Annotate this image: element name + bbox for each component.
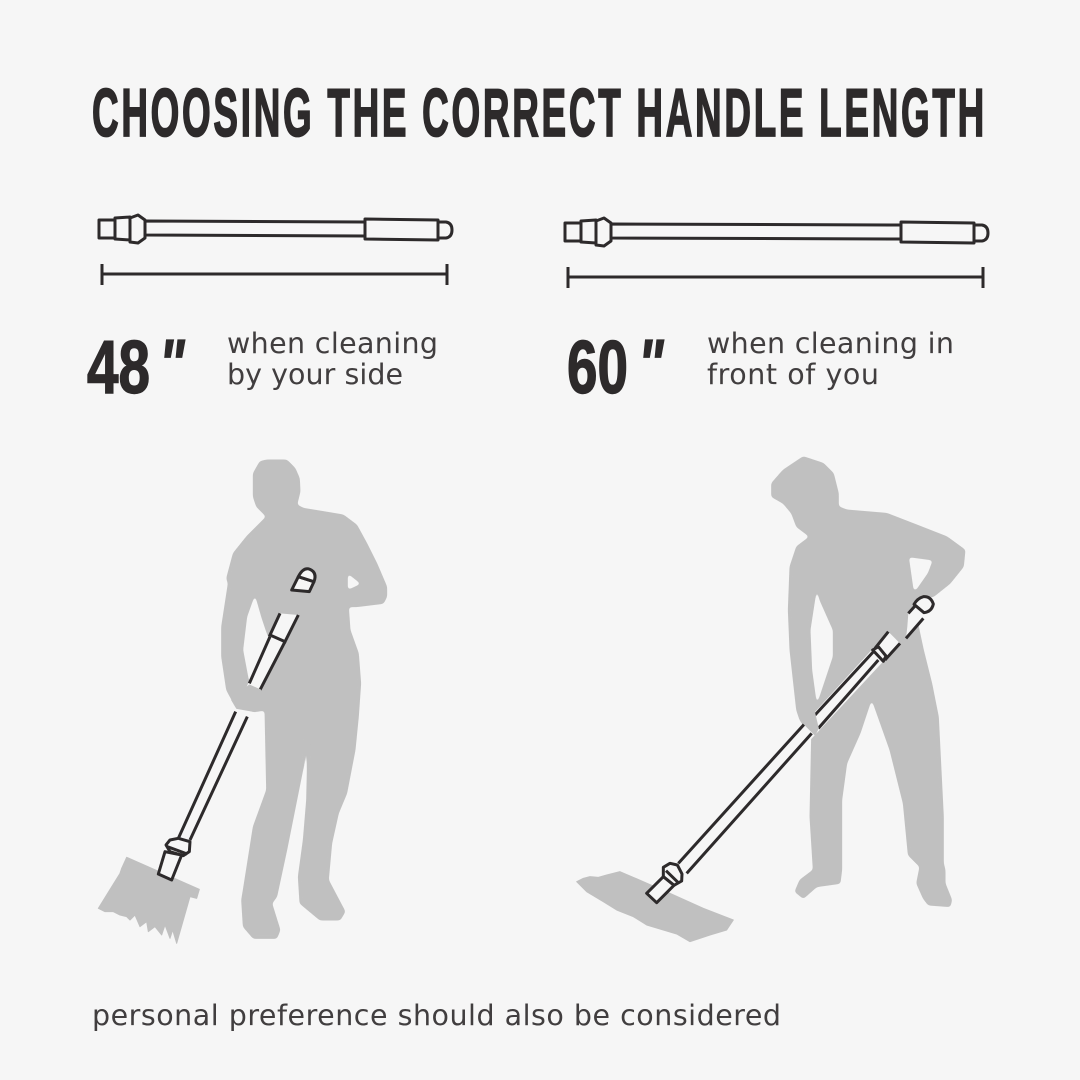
text: when cleaning by your side: when cleaning [227,327,438,360]
text: when cleaning in front of you: front of you [707,358,879,391]
hand [232,685,261,712]
illustration: man cleaning by his side with broom [98,460,387,943]
broom handle [158,569,315,880]
inch mark: " [154,324,191,403]
text: when cleaning in front of you [707,327,954,391]
mop handle [647,597,933,903]
text: when cleaning in front of you: when cleaning in [707,327,954,360]
panel: 60 inch handle [565,218,988,409]
silhouette: man [772,457,965,907]
panel: 48 inch handle [87,215,452,409]
text: when cleaning by your side: by your side [227,358,403,391]
silhouette: man [222,460,387,938]
measure bar: 60 inch [568,267,983,288]
broom head [98,857,199,943]
icon: 60 inch handle [565,218,988,246]
footnote: personal preference should also be considered [92,999,781,1032]
mop pad [577,872,733,942]
illustration: man cleaning in front with dust mop [577,457,965,942]
inch mark: " [633,324,670,403]
measure bar: 48 inch [102,264,447,285]
hand [803,712,818,735]
icon: 48 inch handle [99,215,452,243]
number: 60 inches: 60 [567,325,628,409]
text: when cleaning by your side [227,327,438,391]
number: 48 inches: 48 [87,325,150,409]
